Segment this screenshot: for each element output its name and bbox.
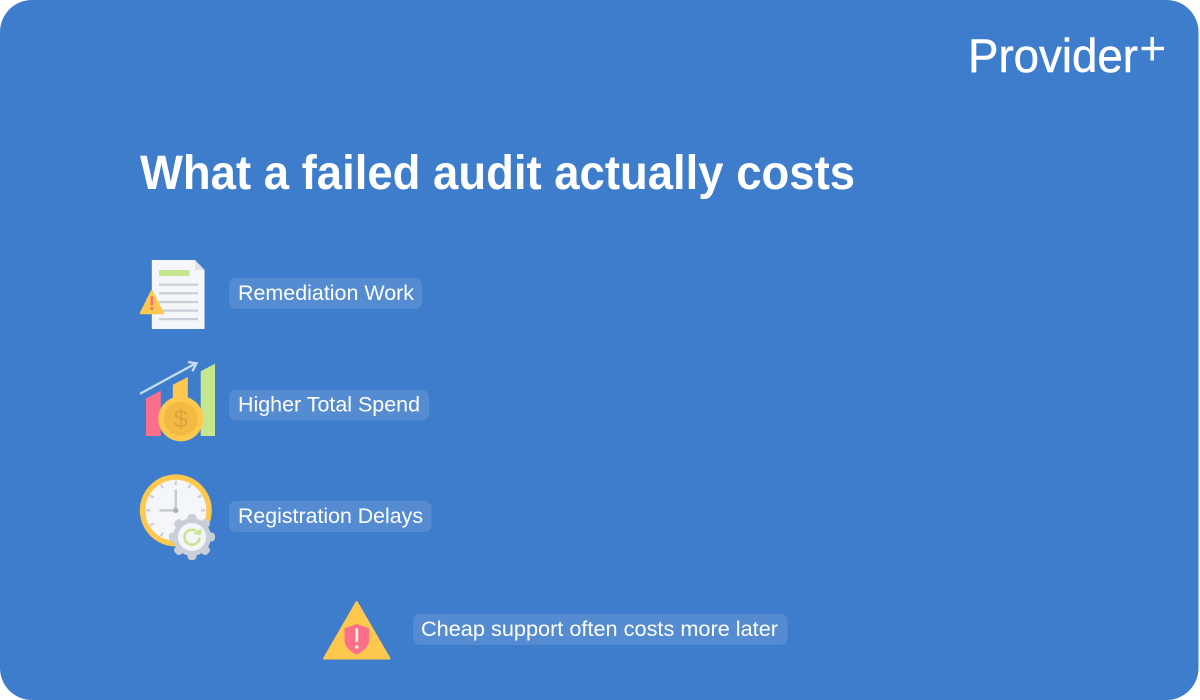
cost item: higher total spend: [140, 362, 429, 441]
icon: rising bar chart with coin: $: [174, 406, 188, 434]
label: Higher Total Spend: Higher Total Spend: [238, 392, 420, 416]
label: Registration Delays: Registration Delays: [238, 504, 423, 528]
label: Remediation Work: Remediation Work: [238, 281, 414, 305]
logo: Provider+: Provider: [968, 29, 1138, 82]
callout: cheap support warning: [324, 602, 788, 658]
icon: clock with gear: [140, 474, 215, 560]
label: Cheap support often costs more later: Cheap support often costs more later: [421, 617, 778, 641]
icon: rising bar chart with coin: [140, 362, 215, 441]
icon: document with warning: [141, 260, 204, 329]
cost item: remediation work: [141, 260, 422, 329]
icon: warning triangle with shield: [324, 602, 390, 658]
cost item: registration delays: [140, 474, 432, 560]
title: What a failed audit actually costs: [140, 147, 855, 200]
